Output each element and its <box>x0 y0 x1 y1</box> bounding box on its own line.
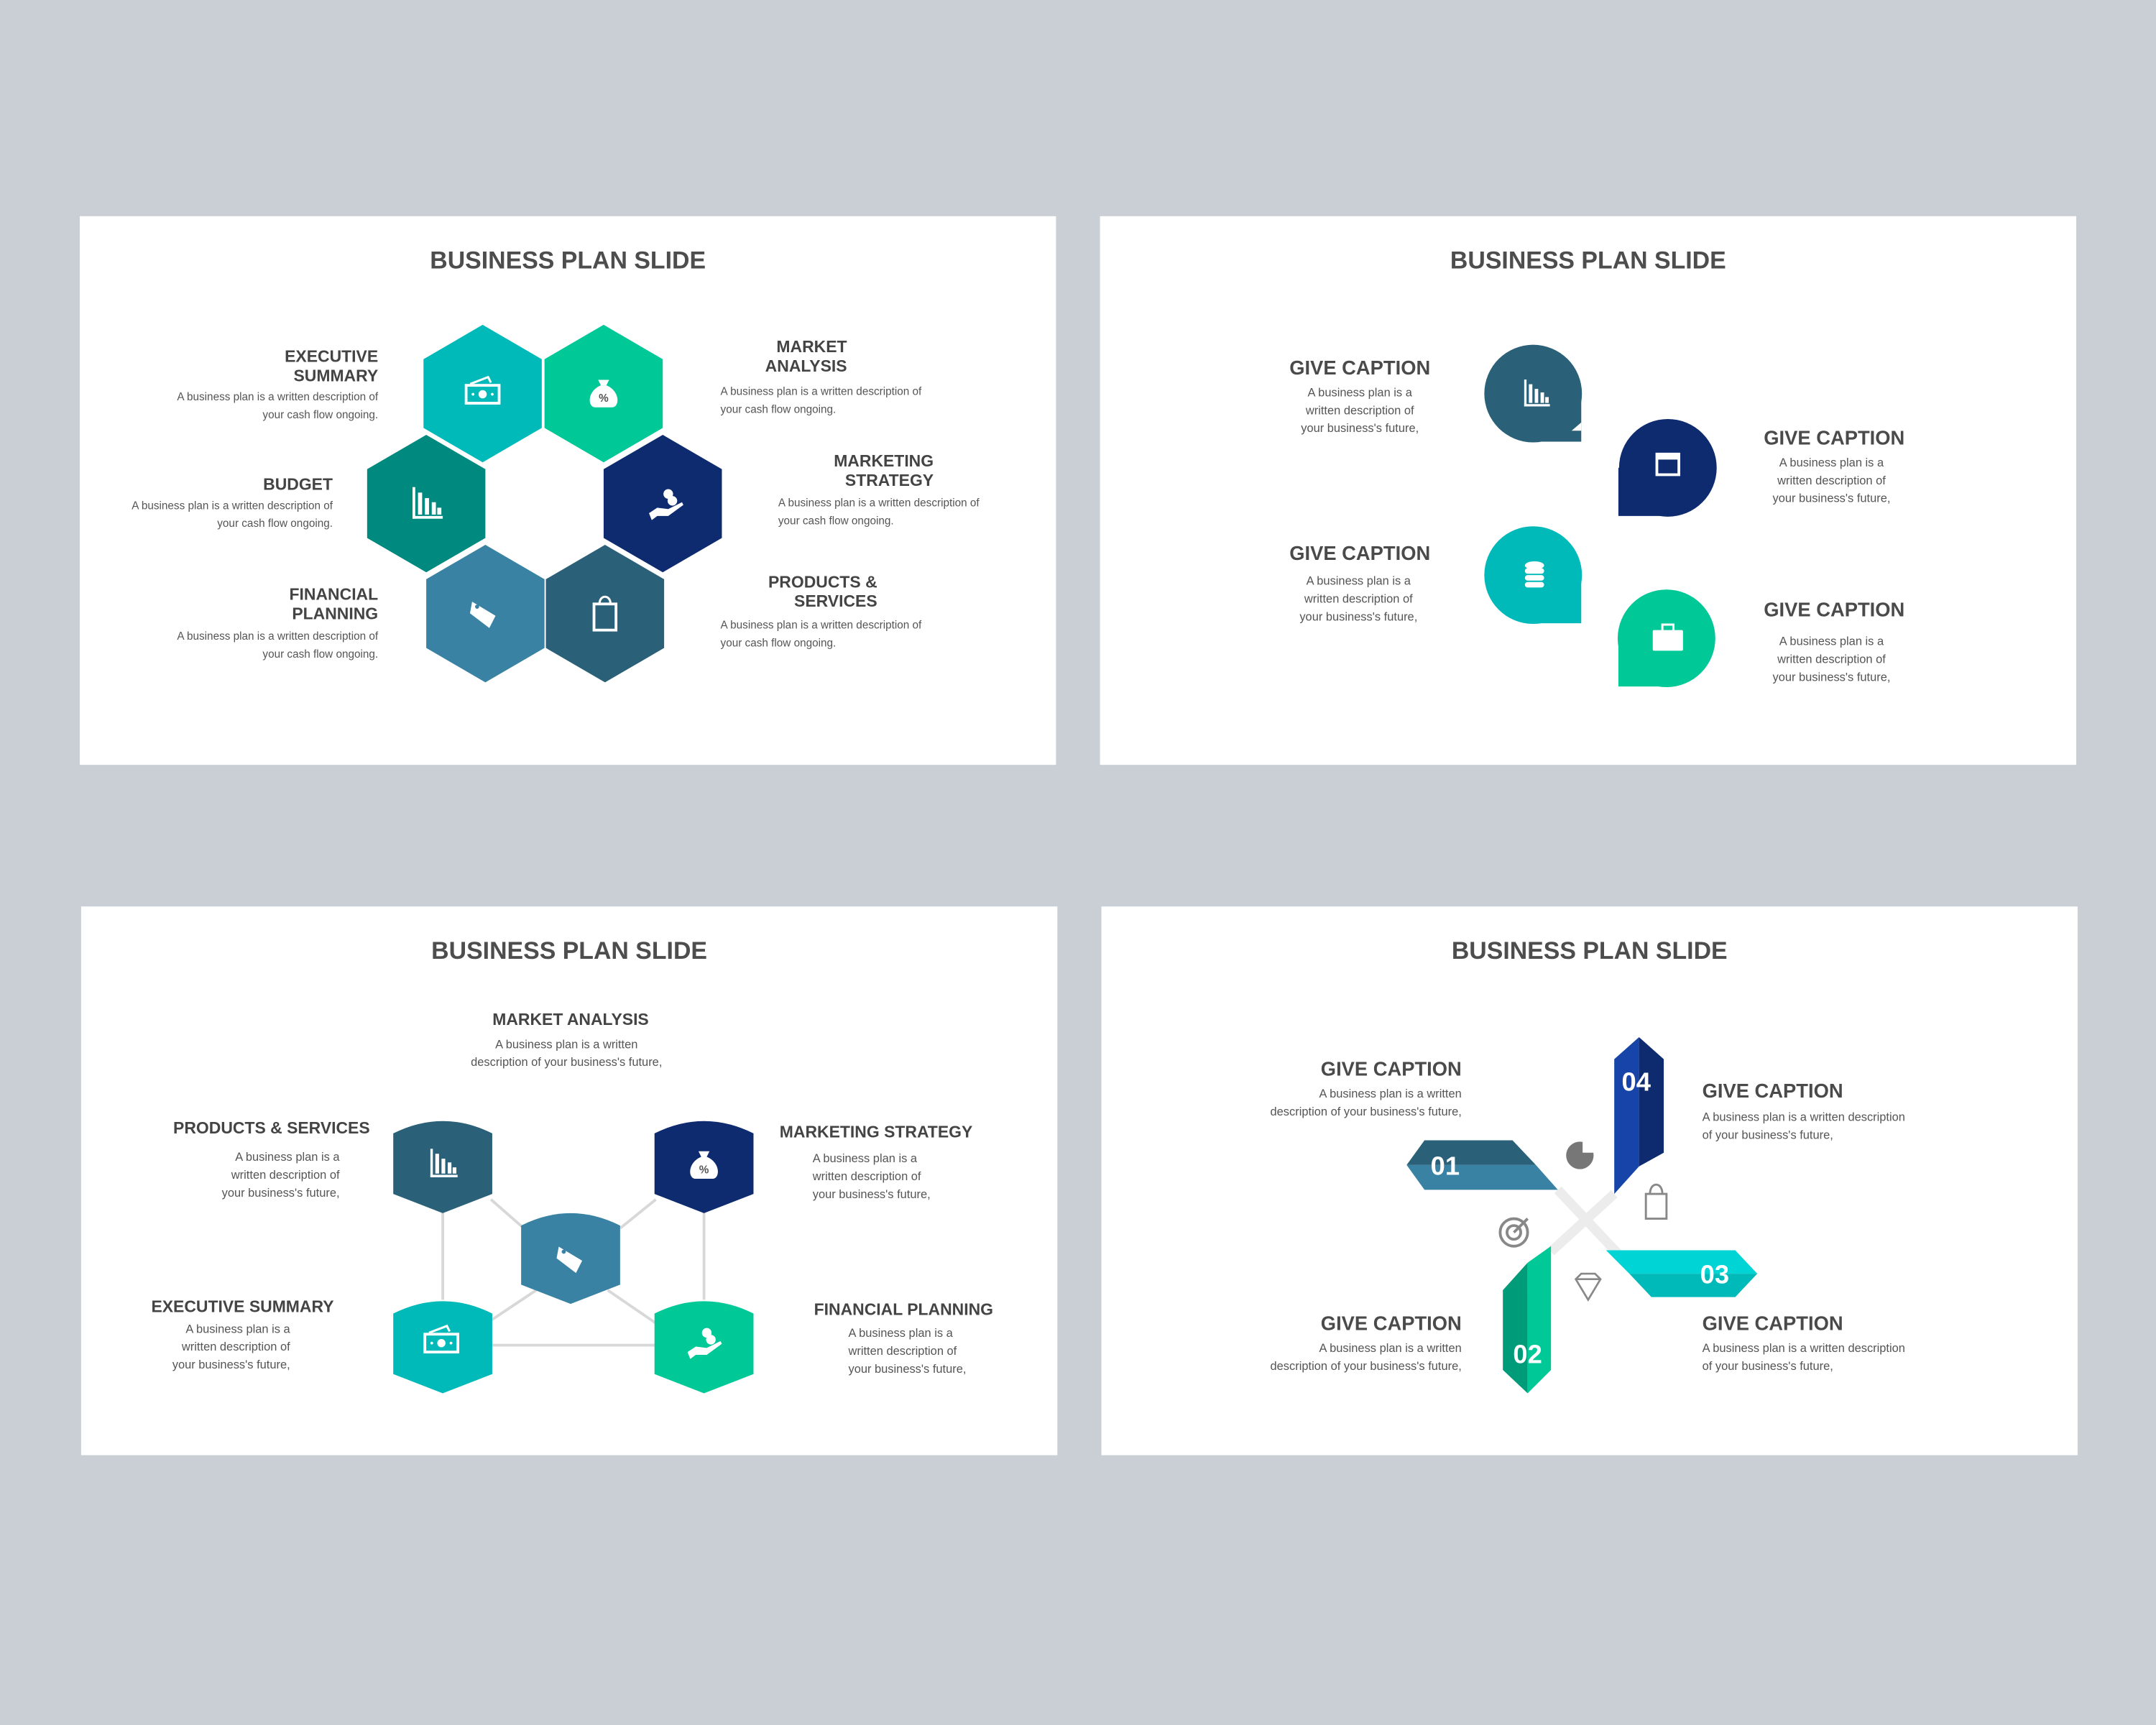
arrow 02 <box>1503 1246 1551 1394</box>
text: executive summary: your cash flow ongoing. <box>262 409 378 421</box>
text: marketing strategy: your business's future, <box>813 1188 931 1201</box>
text: market analysis <box>471 1010 662 1069</box>
text: financial planning: FINANCIAL <box>290 585 378 604</box>
text: caption bottom-right: GIVE CAPTION <box>1703 1312 1843 1335</box>
text: caption 2: GIVE CAPTION <box>1764 426 1904 448</box>
icon: pie chart <box>1566 1139 1596 1169</box>
text: caption bottom-right <box>1703 1312 1905 1373</box>
text: financial planning: A business plan is a <box>848 1327 954 1340</box>
connector lines <box>443 1200 704 1346</box>
hexagon: budget <box>367 435 485 572</box>
hexagon: products & services <box>546 545 664 682</box>
bubble 2 <box>1618 419 1717 517</box>
text: caption top-right: A business plan is a written description <box>1703 1111 1905 1124</box>
arrow 03: 03 <box>1700 1259 1729 1289</box>
text: market analysis: A business plan is a written description of <box>721 385 922 397</box>
text: products & services: your business's future, <box>222 1187 340 1200</box>
text: caption 4: your business's future, <box>1772 671 1890 684</box>
text: caption bottom-left: description of your business's future, <box>1271 1360 1462 1373</box>
text: caption 3: A business plan is a <box>1307 575 1411 588</box>
text: caption 1: GIVE CAPTION <box>1289 356 1430 379</box>
icon: target <box>1500 1219 1528 1246</box>
text: marketing strategy: STRATEGY <box>845 471 934 489</box>
hexagon: financial planning <box>426 545 545 682</box>
text: financial planning: A business plan is a written description of <box>177 630 379 643</box>
hexagon: marketing strategy <box>604 435 722 572</box>
text: budget: your cash flow ongoing. <box>217 518 333 530</box>
text: market analysis: your cash flow ongoing. <box>721 403 836 415</box>
text: products & services <box>173 1118 370 1200</box>
text: caption top-left: A business plan is a written <box>1319 1087 1462 1100</box>
text: caption 2 <box>1764 426 1904 505</box>
text: executive summary: A business plan is a <box>185 1322 291 1335</box>
text: caption 3: GIVE CAPTION <box>1289 542 1430 564</box>
text: caption 3 <box>1289 542 1430 623</box>
text: caption 4: A business plan is a <box>1779 635 1884 648</box>
text: marketing strategy: written description of <box>812 1170 921 1183</box>
arrow 01 <box>1406 1140 1558 1190</box>
text: executive summary: your business's future, <box>172 1358 290 1371</box>
text: caption 2: written description of <box>1777 474 1886 487</box>
node: products & services <box>393 1121 492 1213</box>
text: products & services: your cash flow ongoing. <box>721 638 836 650</box>
arrow 03 <box>1606 1251 1757 1297</box>
text: products & services: A business plan is a <box>235 1151 340 1164</box>
text: financial planning: your cash flow ongoing. <box>262 648 378 661</box>
panel: network nodes <box>81 906 1057 1455</box>
text: financial planning: PLANNING <box>292 604 378 622</box>
node: marketing strategy <box>655 1121 753 1213</box>
node: executive summary <box>393 1301 492 1394</box>
text: caption top-left: description of your business's future, <box>1271 1105 1462 1118</box>
text: caption 1: written description of <box>1305 404 1414 417</box>
text: financial planning <box>814 1300 993 1376</box>
text: marketing strategy: MARKETING <box>834 451 934 470</box>
text: caption 4: GIVE CAPTION <box>1764 599 1904 621</box>
text: budget: BUDGET <box>263 475 333 494</box>
panel: speech bubbles <box>1100 216 2076 765</box>
text: executive summary: SUMMARY <box>293 366 378 385</box>
text: caption 4: written description of <box>1777 653 1886 666</box>
text: caption 3: your business's future, <box>1299 610 1417 623</box>
text: caption 4 <box>1764 599 1904 684</box>
text: market analysis: ANALYSIS <box>765 356 847 375</box>
text: products & services <box>721 572 922 650</box>
arrow 04: 04 <box>1622 1067 1651 1097</box>
text: caption 1 <box>1289 356 1430 435</box>
node: center <box>521 1213 620 1304</box>
text: products & services: written description of <box>231 1169 340 1182</box>
text: caption 1: your business's future, <box>1301 422 1419 435</box>
text: marketing strategy: your cash flow ongoing. <box>778 515 894 527</box>
hexagon: executive summary <box>423 325 542 462</box>
text: caption top-left: GIVE CAPTION <box>1321 1058 1462 1080</box>
text: products & services: PRODUCTS & <box>768 572 877 591</box>
text: marketing strategy <box>780 1123 972 1201</box>
node: financial planning <box>655 1301 753 1394</box>
text: caption top-right: of your business's future, <box>1703 1129 1833 1142</box>
arrow 02: 02 <box>1513 1339 1542 1368</box>
text: marketing strategy: MARKETING STRATEGY <box>780 1123 972 1141</box>
text: financial planning: FINANCIAL PLANNING <box>814 1300 993 1318</box>
text: marketing strategy <box>778 451 980 527</box>
title: BUSINESS PLAN SLIDE <box>430 247 706 274</box>
text: financial planning: written description of <box>847 1345 957 1358</box>
text: budget: A business plan is a written description of <box>132 500 333 512</box>
text: market analysis: description of your business's future, <box>471 1056 662 1069</box>
icon: diamond <box>1576 1274 1600 1300</box>
text: market analysis: A business plan is a written <box>495 1038 637 1051</box>
text: marketing strategy: A business plan is a written description of <box>778 497 980 509</box>
text: executive summary: EXECUTIVE SUMMARY <box>151 1297 334 1316</box>
text: executive summary <box>177 347 379 421</box>
text: caption bottom-right: of your business's future, <box>1703 1360 1833 1373</box>
text: market analysis: MARKET ANALYSIS <box>492 1010 649 1029</box>
text: executive summary: A business plan is a written description of <box>177 391 379 403</box>
text: marketing strategy: A business plan is a <box>813 1152 918 1165</box>
arrow 01: 01 <box>1431 1151 1460 1180</box>
text: caption top-right <box>1703 1080 1905 1142</box>
text: caption top-right: GIVE CAPTION <box>1703 1080 1843 1102</box>
title: BUSINESS PLAN SLIDE <box>1452 937 1728 965</box>
text: financial planning <box>177 585 379 661</box>
text: caption 2: your business's future, <box>1772 492 1890 505</box>
text: caption bottom-left: GIVE CAPTION <box>1321 1312 1462 1335</box>
text: caption bottom-right: A business plan is a written description <box>1703 1342 1905 1355</box>
text: budget <box>132 475 333 530</box>
text: caption top-left <box>1271 1058 1462 1118</box>
text: executive summary: EXECUTIVE <box>285 347 378 366</box>
hexagon: market analysis <box>545 325 663 462</box>
text: executive summary: written description of <box>181 1340 290 1353</box>
text: products & services: A business plan is a written description of <box>721 620 922 632</box>
panel: pinwheel arrows <box>1102 906 2078 1455</box>
text: caption 3: written description of <box>1304 592 1413 605</box>
bubble 1 <box>1484 345 1582 442</box>
text: products & services: SERVICES <box>794 592 877 610</box>
text: market analysis: MARKET <box>776 337 847 356</box>
text: caption 1: A business plan is a <box>1308 386 1413 399</box>
text: market analysis <box>721 337 922 415</box>
text: executive summary <box>151 1297 334 1371</box>
bubble 4 <box>1618 589 1715 687</box>
icon: shopping bag <box>1646 1184 1667 1219</box>
text: caption bottom-left <box>1271 1312 1462 1373</box>
center shading <box>1551 1190 1623 1259</box>
arrow 04 <box>1614 1037 1664 1194</box>
bubble 3 <box>1484 526 1582 624</box>
text: financial planning: your business's future, <box>848 1363 966 1376</box>
text: caption bottom-left: A business plan is a written <box>1319 1342 1462 1355</box>
title: BUSINESS PLAN SLIDE <box>431 937 707 965</box>
panel: hexagon business plan <box>80 216 1056 765</box>
title: BUSINESS PLAN SLIDE <box>1450 247 1726 274</box>
text: products & services: PRODUCTS & SERVICES <box>173 1118 370 1137</box>
text: caption 2: A business plan is a <box>1779 456 1884 469</box>
